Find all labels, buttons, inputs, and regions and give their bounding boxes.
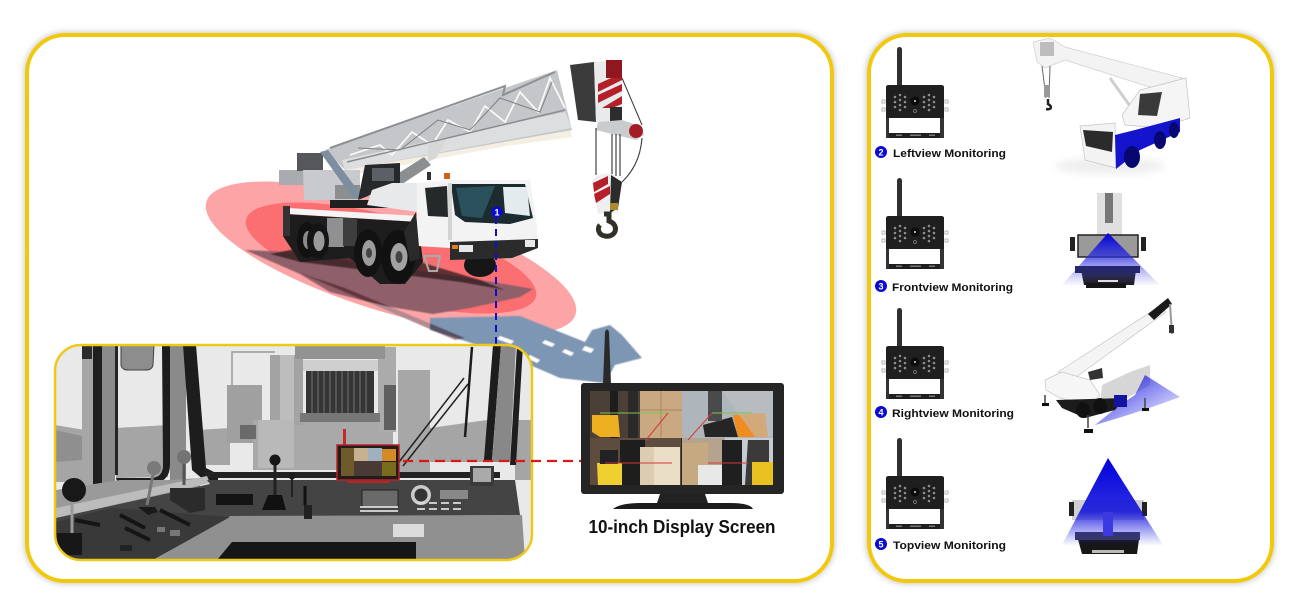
thumbnail: crane right view (1042, 298, 1180, 433)
label: Leftview Monitoring (893, 148, 1006, 160)
label: Frontview Monitoring (892, 282, 1013, 294)
number badge 2: 2 (878, 148, 884, 158)
display link: red dashed line (403, 460, 581, 462)
truck cab (404, 172, 538, 271)
chassis and wheels (283, 206, 496, 284)
joysticks (57, 450, 312, 555)
10-inch display monitor (581, 330, 784, 509)
row: frontview camera (875, 178, 1013, 294)
thumbnail: crane front view (1062, 193, 1160, 288)
camera 1 link: blue dashed line (495, 217, 497, 346)
panel: main crane system (27, 35, 832, 581)
stand (657, 494, 708, 503)
camera feeds on screen (590, 391, 773, 485)
camera icon (882, 178, 948, 269)
mini display in cab (337, 429, 399, 482)
label: Rightview Monitoring (892, 408, 1014, 420)
camera icon (882, 308, 948, 399)
inset border (55, 345, 532, 560)
crane ground shadow (245, 248, 642, 383)
label: Topview Monitoring (893, 540, 1006, 552)
display caption: 10-inch Display Screen (588, 517, 776, 537)
boom (325, 62, 596, 190)
superstructure (279, 150, 420, 212)
number badge 3: 3 (878, 282, 884, 292)
boom head with chevrons (594, 60, 644, 140)
hook and ropes (592, 128, 642, 236)
antenna (603, 330, 611, 384)
dashboard console (56, 466, 525, 560)
thumbnail: crane left view (1033, 38, 1190, 174)
camera icon (882, 438, 948, 529)
camera icon (882, 47, 948, 138)
camera 1 marker: 1 (494, 208, 500, 218)
number badge 5: 5 (878, 540, 884, 550)
number badge 4: 4 (878, 408, 884, 418)
row: topview camera (875, 438, 1006, 552)
row: rightview camera (875, 308, 1014, 420)
panel: camera views (869, 35, 1272, 581)
mobile crane (279, 60, 644, 284)
row: leftview camera (875, 47, 1006, 160)
wiper (399, 347, 472, 466)
inset: cab interior photo (55, 345, 532, 560)
thumbnail: crane top view (1062, 458, 1163, 554)
red detection zones (191, 150, 591, 366)
window pillars (82, 345, 523, 495)
background treeline and buildings (55, 420, 532, 482)
winch machinery (227, 345, 430, 473)
camera 1 marker (492, 206, 502, 218)
